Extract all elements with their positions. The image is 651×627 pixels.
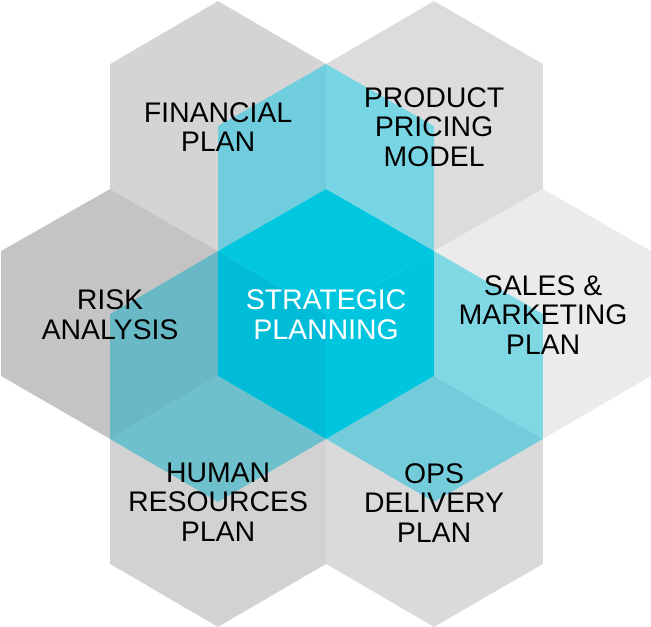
teal overlay: left (110, 251, 218, 439)
label: financial plan: FINANCIAL (144, 97, 292, 129)
label: strategic planning: STRATEGIC (246, 284, 406, 316)
label: human resources plan: HUMAN (166, 457, 270, 489)
hexagon: product pricing model (326, 1, 543, 251)
label: ops delivery plan: DELIVERY (364, 487, 504, 519)
hexagon: sales and marketing plan (434, 189, 651, 439)
label: human resources plan: PLAN (181, 516, 255, 548)
label: risk analysis: RISK (77, 284, 143, 316)
label: product pricing model: MODEL (384, 141, 484, 173)
center hexagon (218, 189, 434, 439)
teal overlay: bottom left (110, 376, 326, 502)
label: sales and marketing plan: MARKETING (459, 299, 627, 331)
teal overlay: bottom right (326, 376, 543, 502)
label: financial plan: PLAN (181, 126, 255, 158)
label: product pricing model: PRODUCT (364, 82, 504, 114)
label: risk analysis: ANALYSIS (42, 314, 178, 346)
label: sales and marketing plan: SALES & (484, 270, 602, 302)
label: ops delivery plan: PLAN (397, 517, 471, 549)
label: product pricing model: PRICING (375, 111, 493, 143)
label: ops delivery plan: OPS (404, 458, 464, 490)
teal overlay: top right (326, 64, 434, 251)
hexagon: financial plan (110, 1, 326, 251)
label: human resources plan: RESOURCES (128, 486, 308, 518)
hexagon: human resources plan (110, 377, 326, 627)
hexagon: ops delivery plan (326, 377, 543, 627)
hexagon: risk analysis (1, 189, 218, 439)
teal overlay: top left (218, 64, 326, 251)
label: strategic planning: PLANNING (253, 314, 399, 346)
teal overlay: right (434, 251, 543, 439)
label: sales and marketing plan: PLAN (506, 329, 580, 361)
